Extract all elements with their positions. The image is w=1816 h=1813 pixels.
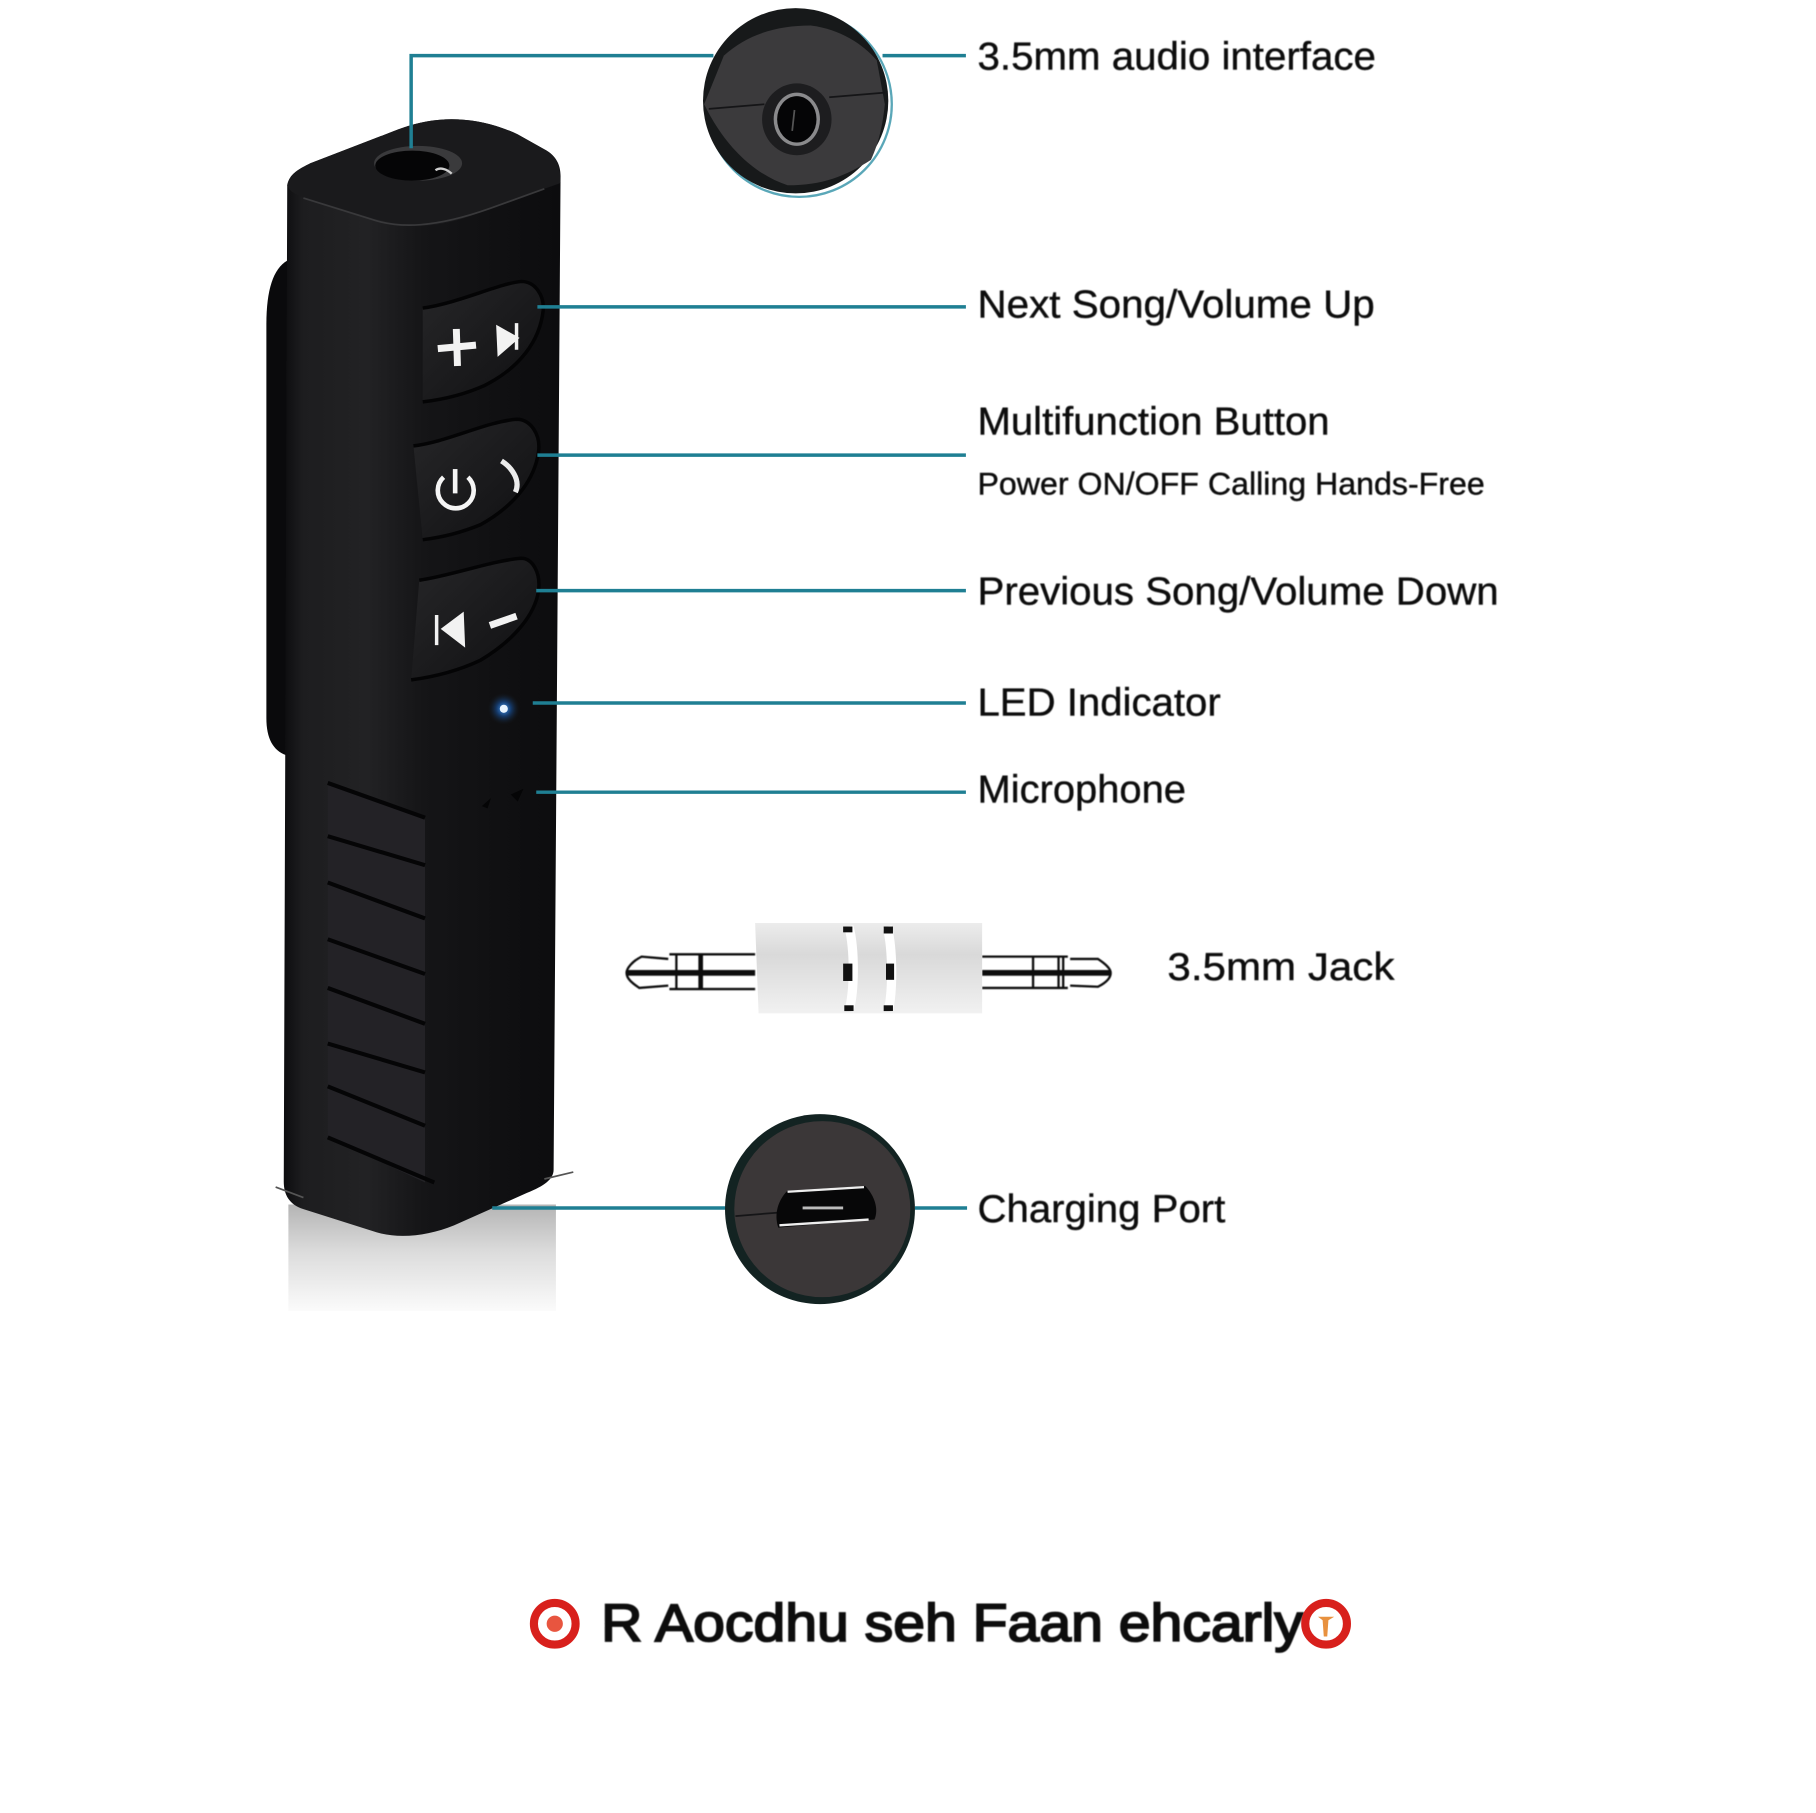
base wisps bbox=[276, 1172, 573, 1198]
device top face bbox=[287, 119, 561, 226]
device body bbox=[284, 119, 561, 1236]
label: LED indicator: LED Indicator bbox=[977, 681, 1221, 725]
micro USB port bbox=[776, 1186, 876, 1228]
right plug tip bbox=[982, 957, 1111, 988]
device: Bluetooth receiver bbox=[266, 119, 573, 1236]
detail circle: 3.5mm audio interface bbox=[703, 8, 892, 197]
line: next song bbox=[537, 305, 966, 308]
icon: power bbox=[438, 469, 474, 508]
3.5mm jack adapter bbox=[627, 923, 1111, 1013]
icon: left red badge bbox=[534, 1603, 576, 1645]
icon: previous track bbox=[437, 615, 463, 645]
icon: right red badge bbox=[1305, 1603, 1347, 1645]
line: audio interface bbox=[411, 56, 713, 148]
detail circle: charging port bbox=[725, 1114, 915, 1304]
button: multifunction bbox=[413, 419, 539, 540]
label: previous song: Previous Song/Volume Down bbox=[977, 570, 1499, 614]
label: microphone: Microphone bbox=[977, 768, 1186, 812]
label: 3.5mm audio interface: 3.5mm audio interface bbox=[977, 34, 1376, 78]
coupler markings bbox=[843, 927, 894, 1011]
callout lines bbox=[411, 56, 967, 1208]
white coupler body bbox=[755, 923, 982, 1013]
icon: minus bbox=[490, 616, 517, 625]
button: previous / volume down bbox=[411, 558, 539, 680]
line: microphone bbox=[536, 791, 966, 794]
grille ribs bbox=[328, 783, 434, 1182]
icon: phone bbox=[501, 461, 517, 492]
microphone holes bbox=[482, 789, 523, 808]
left plug tip bbox=[627, 954, 755, 989]
labels bbox=[977, 34, 1499, 1231]
label: 3.5mm jack: 3.5mm Jack bbox=[1167, 945, 1395, 989]
LED indicator bbox=[488, 693, 520, 725]
label: multifunction button: Multifunction Button bbox=[977, 399, 1330, 443]
belt clip bbox=[266, 261, 287, 755]
line: charging left bbox=[492, 1206, 727, 1209]
label: power and calling: Power ON/OFF Calling Hands-Free bbox=[977, 467, 1485, 502]
line: previous song bbox=[536, 589, 966, 592]
icon: next track bbox=[498, 323, 517, 353]
product reflection bbox=[288, 1204, 556, 1311]
caption text: R Aocdhu seh Faan ehcarly bbox=[601, 1594, 1303, 1653]
line: LED bbox=[533, 702, 966, 705]
label: charging port: Charging Port bbox=[977, 1187, 1225, 1231]
icon: plus bbox=[438, 329, 476, 366]
line: multifunction bbox=[537, 454, 966, 457]
label: next song: Next Song/Volume Up bbox=[977, 282, 1375, 326]
bottom caption bbox=[534, 1594, 1347, 1653]
button: next / volume up bbox=[423, 281, 543, 402]
top audio jack bbox=[374, 146, 462, 181]
line: audio interface right bbox=[883, 54, 966, 57]
line: charging right bbox=[915, 1206, 967, 1209]
